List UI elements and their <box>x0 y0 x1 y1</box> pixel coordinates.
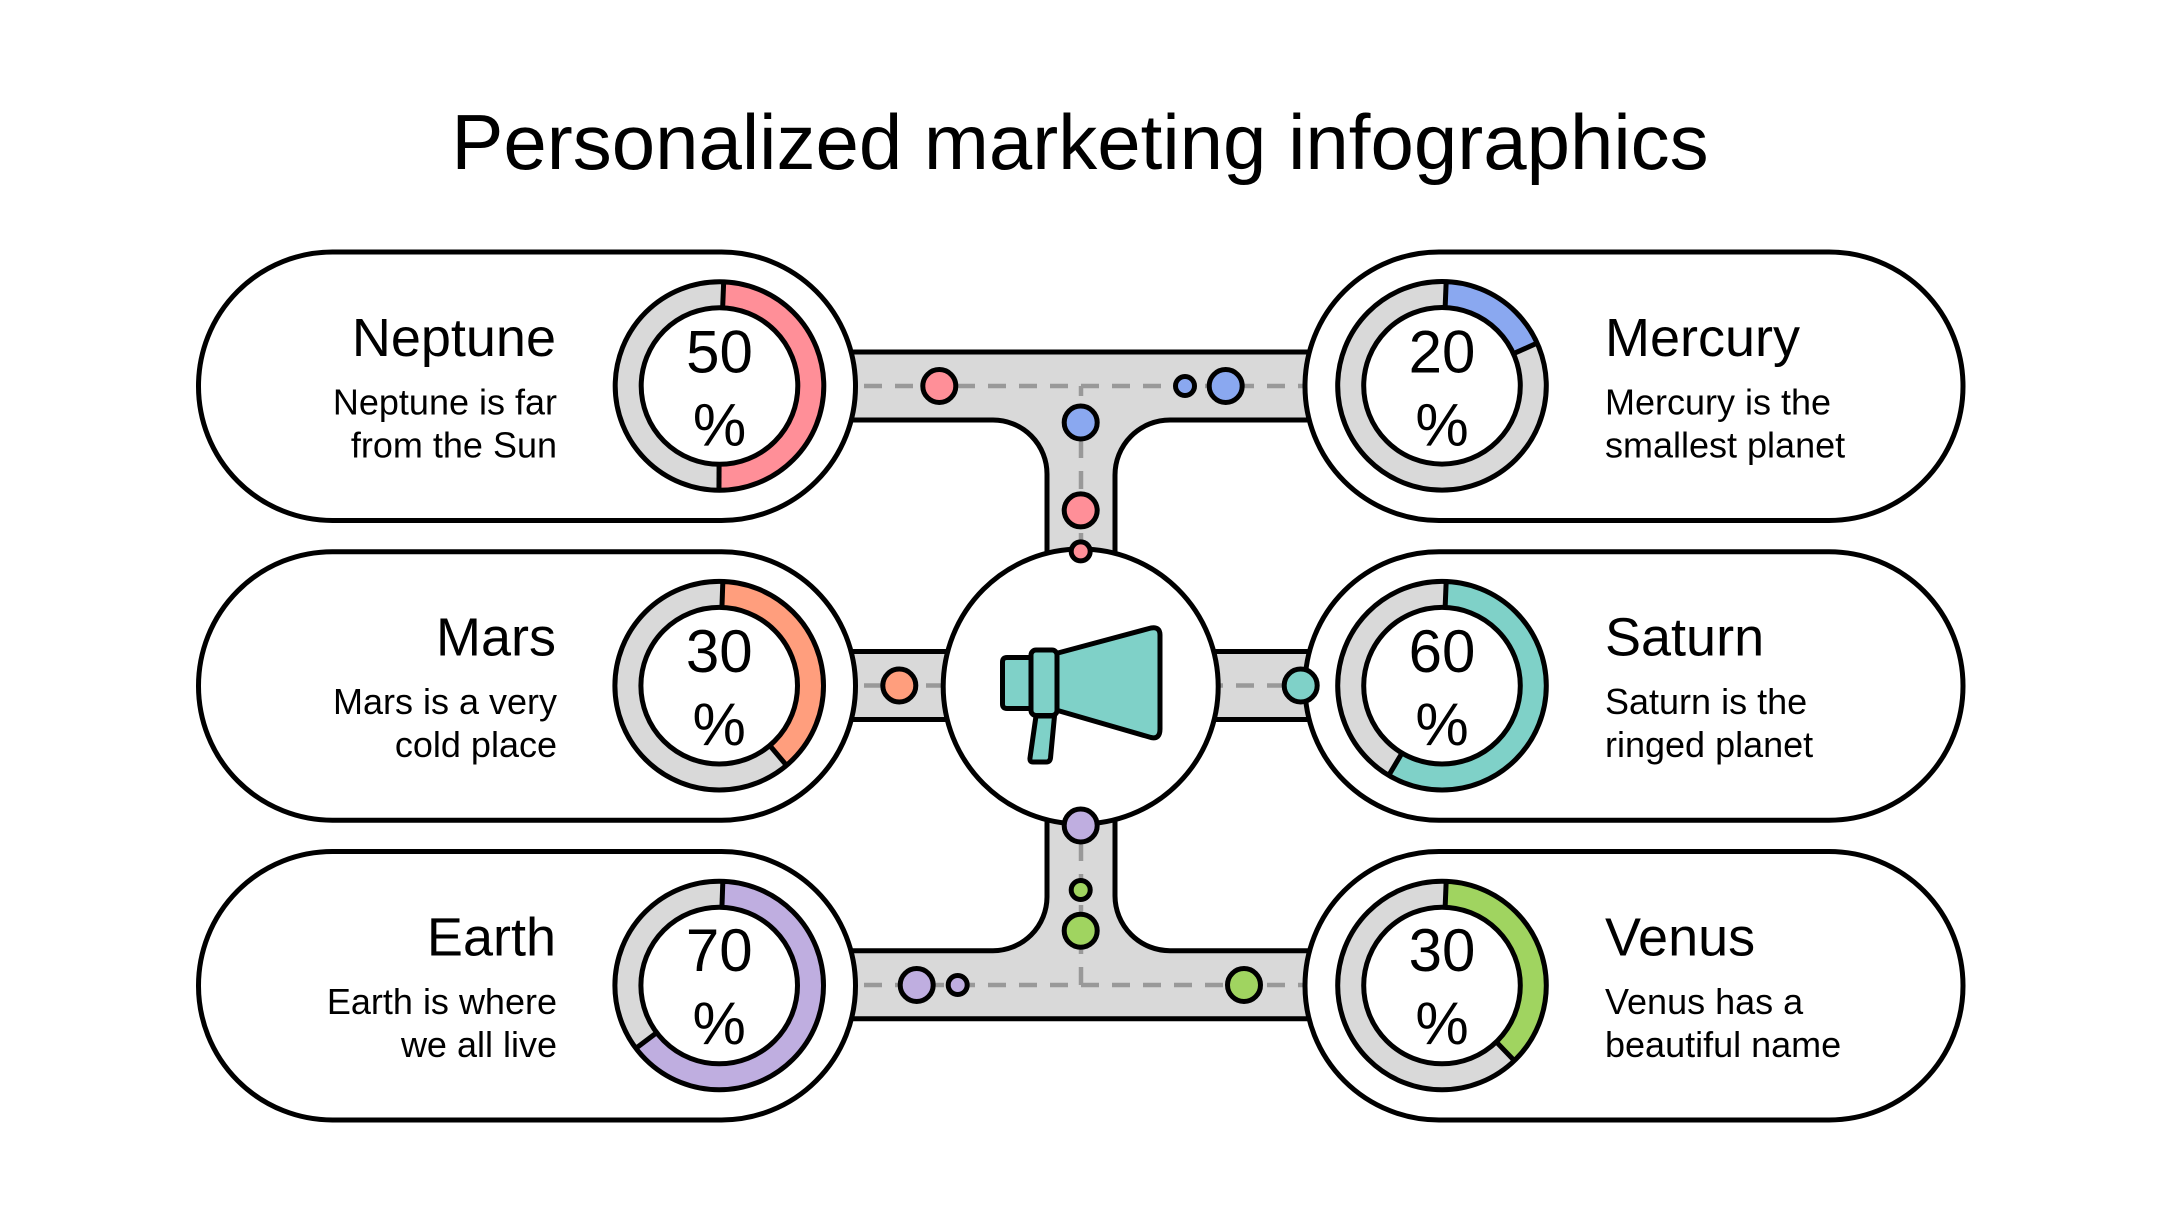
donut chart: 30 percent Venus: % <box>1415 990 1469 1057</box>
route dots: green <box>1064 880 1260 1002</box>
heading: Mars: Mars <box>436 608 556 668</box>
text: Mercury description: Mercury is the <box>1605 382 1831 422</box>
donut chart: 30 percent Venus <box>1338 881 1546 1090</box>
heading: Saturn: Saturn <box>1605 608 1764 668</box>
panel: Saturn <box>1305 552 1963 820</box>
text: Mars description: cold place <box>395 724 557 765</box>
icon: megaphone <box>1002 628 1160 762</box>
route dots: purple <box>900 809 1097 1002</box>
text: Venus description: beautiful name <box>1605 1024 1841 1065</box>
title: Personalized marketing infographics <box>451 98 1709 186</box>
donut chart: 20 percent: 20 <box>1409 318 1475 385</box>
donut chart: 30 percent Mars: 30 <box>686 618 753 685</box>
text: Saturn description <box>1605 681 1813 765</box>
donut chart: 20 percent: % <box>1415 391 1469 458</box>
text: Saturn description: ringed planet <box>1605 724 1813 765</box>
text: Mars description: Mars is a very <box>333 681 557 722</box>
panel: Earth <box>198 852 856 1120</box>
donut chart: 50 percent: 50 <box>686 318 753 386</box>
route dots: pink <box>923 370 1097 561</box>
panel: Venus <box>1305 852 1963 1120</box>
center circle <box>943 549 1218 824</box>
text: Mars description <box>333 681 557 765</box>
text: Earth description: we all live <box>400 1024 557 1065</box>
panel: Mercury <box>1305 252 1963 520</box>
route dot: teal <box>1284 669 1317 702</box>
donut chart: 30 percent Mars: % <box>693 691 746 758</box>
connector road: top <box>850 352 1310 560</box>
connector road: bottom <box>850 810 1310 1019</box>
donut chart: 70 percent <box>615 881 824 1090</box>
connector road: middle <box>850 652 1310 720</box>
donut chart: 60 percent: % <box>1415 691 1469 758</box>
heading: Mercury: Mercury <box>1605 308 1800 368</box>
donut chart: 70 percent: % <box>693 990 746 1057</box>
text: Neptune description <box>333 382 557 466</box>
heading: Neptune: Neptune <box>352 308 556 368</box>
donut chart: 50 percent <box>615 282 824 490</box>
route dots: blue <box>1064 370 1242 439</box>
route dot: orange <box>883 669 916 702</box>
text: Neptune description: from the Sun <box>351 424 557 466</box>
text: Venus description: Venus has a <box>1605 981 1804 1022</box>
donut chart: 20 percent <box>1338 282 1546 490</box>
text: Venus description <box>1605 981 1841 1065</box>
donut chart: 60 percent <box>1338 581 1546 790</box>
panel: Mars <box>198 552 856 820</box>
heading: Venus: Venus <box>1605 908 1755 968</box>
donut chart: 30 percent Venus: 30 <box>1409 917 1475 984</box>
heading: Earth: Earth <box>427 908 556 968</box>
donut chart: 70 percent: 70 <box>686 917 753 984</box>
text: Earth description <box>327 981 557 1065</box>
donut chart: 50 percent: % <box>693 392 746 458</box>
text: Mercury description: smallest planet <box>1605 424 1845 466</box>
text: Earth description: Earth is where <box>327 981 557 1022</box>
donut chart: 30 percent Mars <box>615 581 824 790</box>
panel: Neptune <box>198 252 856 520</box>
text: Neptune description: Neptune is far <box>333 382 557 422</box>
text: Mercury description <box>1605 382 1845 466</box>
donut chart: 60 percent: 60 <box>1409 618 1475 685</box>
text: Saturn description: Saturn is the <box>1605 681 1807 722</box>
